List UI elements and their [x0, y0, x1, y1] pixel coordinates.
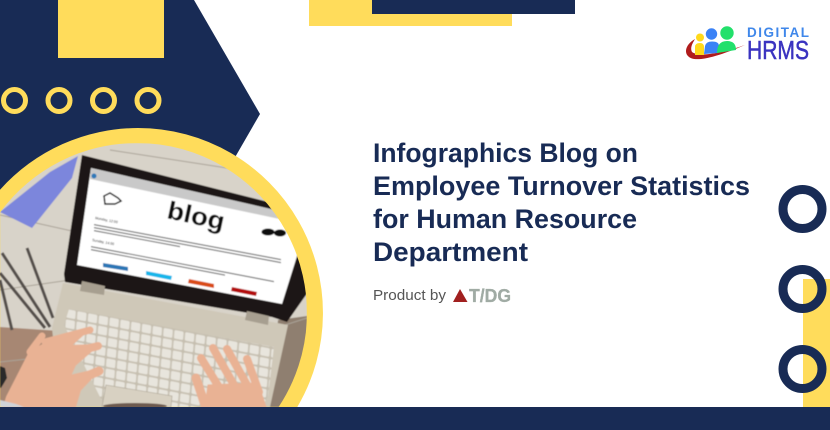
TDG wordmark: T/DG	[469, 286, 511, 306]
laptop screen	[77, 168, 310, 304]
screen post text	[91, 216, 281, 282]
screen post text: Sunday, 14:00	[92, 238, 115, 246]
logo word DIGITAL: DIGITAL	[747, 25, 809, 40]
shirt sleeve	[0, 400, 24, 407]
logo person green	[717, 26, 736, 53]
row of yellow rings	[4, 90, 159, 112]
yellow ring around photo	[0, 128, 323, 407]
top yellow bar	[309, 0, 512, 26]
screen icon: paper	[104, 193, 121, 204]
keyboard	[64, 309, 274, 407]
logo person yellow	[695, 34, 704, 55]
right yellow bar	[803, 279, 830, 407]
title	[373, 138, 750, 267]
title: for Human Resource	[373, 204, 637, 234]
laptop base	[52, 283, 288, 407]
title: Department	[373, 237, 528, 267]
title: Employee Turnover Statistics	[373, 171, 750, 201]
screen icon: speech bubbles	[262, 228, 286, 236]
bottom navy band	[0, 407, 830, 430]
logo person blue	[704, 28, 719, 54]
right hand	[196, 348, 266, 407]
right navy rings	[783, 190, 822, 388]
blog heading on screen: blog	[165, 196, 227, 236]
trackpad	[102, 385, 172, 407]
top navy bar	[372, 0, 575, 14]
screen post text: Monday, 12:00	[95, 216, 118, 224]
logo swoosh	[686, 39, 745, 59]
product by line: Product by	[373, 288, 447, 304]
trackpad blur shadow	[102, 402, 168, 407]
left hand	[4, 330, 100, 407]
browser bar	[90, 168, 278, 220]
Digital HRMS logo	[686, 25, 809, 65]
yellow square	[58, 0, 164, 58]
blue folder	[0, 156, 78, 228]
screen coloured buttons	[103, 263, 128, 271]
wooden desk	[0, 143, 307, 332]
circular laptop photo	[0, 143, 320, 409]
browser icons	[92, 174, 96, 178]
logo word HRMS: HRMS	[747, 35, 809, 65]
title: Infographics Blog on	[373, 138, 638, 168]
phone on desk	[0, 366, 7, 388]
hinges	[80, 281, 105, 295]
pencils	[0, 248, 53, 330]
TDG triangle mark	[453, 289, 468, 302]
navy hexagon background	[0, 0, 260, 218]
laptop lid	[64, 155, 320, 322]
product by line	[373, 286, 511, 306]
